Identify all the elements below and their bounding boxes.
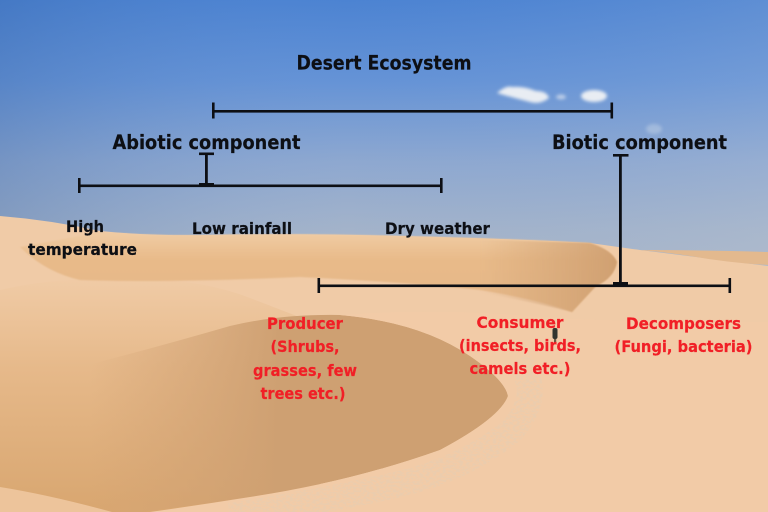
clouds — [497, 87, 662, 134]
label: consumer: camels etc.) — [470, 359, 570, 378]
background: sky — [0, 0, 768, 270]
label: low rainfall: Low rainfall — [192, 219, 292, 238]
icon: distant person walking — [552, 328, 558, 343]
connector: main branch — [212, 102, 613, 118]
label: dry weather: Dry weather — [385, 219, 490, 238]
label: producer: trees etc.) — [260, 384, 346, 403]
label: consumer — [459, 313, 581, 378]
connector: biotic branch — [318, 154, 731, 293]
label: consumer: Consumer — [476, 313, 564, 332]
label: producer: Producer — [267, 314, 343, 333]
label: high temperature: temperature — [28, 240, 137, 259]
label: consumer: (insects, birds, — [459, 336, 581, 355]
label: high temperature: High — [66, 217, 104, 236]
label: producer: (Shrubs, — [270, 337, 340, 356]
heading: abiotic component: Abiotic component — [112, 131, 300, 154]
label: producer — [253, 314, 357, 403]
label: decomposers — [614, 314, 752, 356]
label: decomposers: (Fungi, bacteria) — [614, 337, 752, 356]
label: high temperature — [28, 217, 137, 259]
title: Desert Ecosystem — [296, 52, 472, 74]
background: sand dunes — [0, 216, 768, 512]
heading: biotic component: Biotic component — [552, 131, 727, 154]
label: producer: grasses, few — [253, 361, 357, 380]
label: decomposers: Decomposers — [626, 314, 741, 333]
connector: abiotic branch — [78, 152, 443, 193]
